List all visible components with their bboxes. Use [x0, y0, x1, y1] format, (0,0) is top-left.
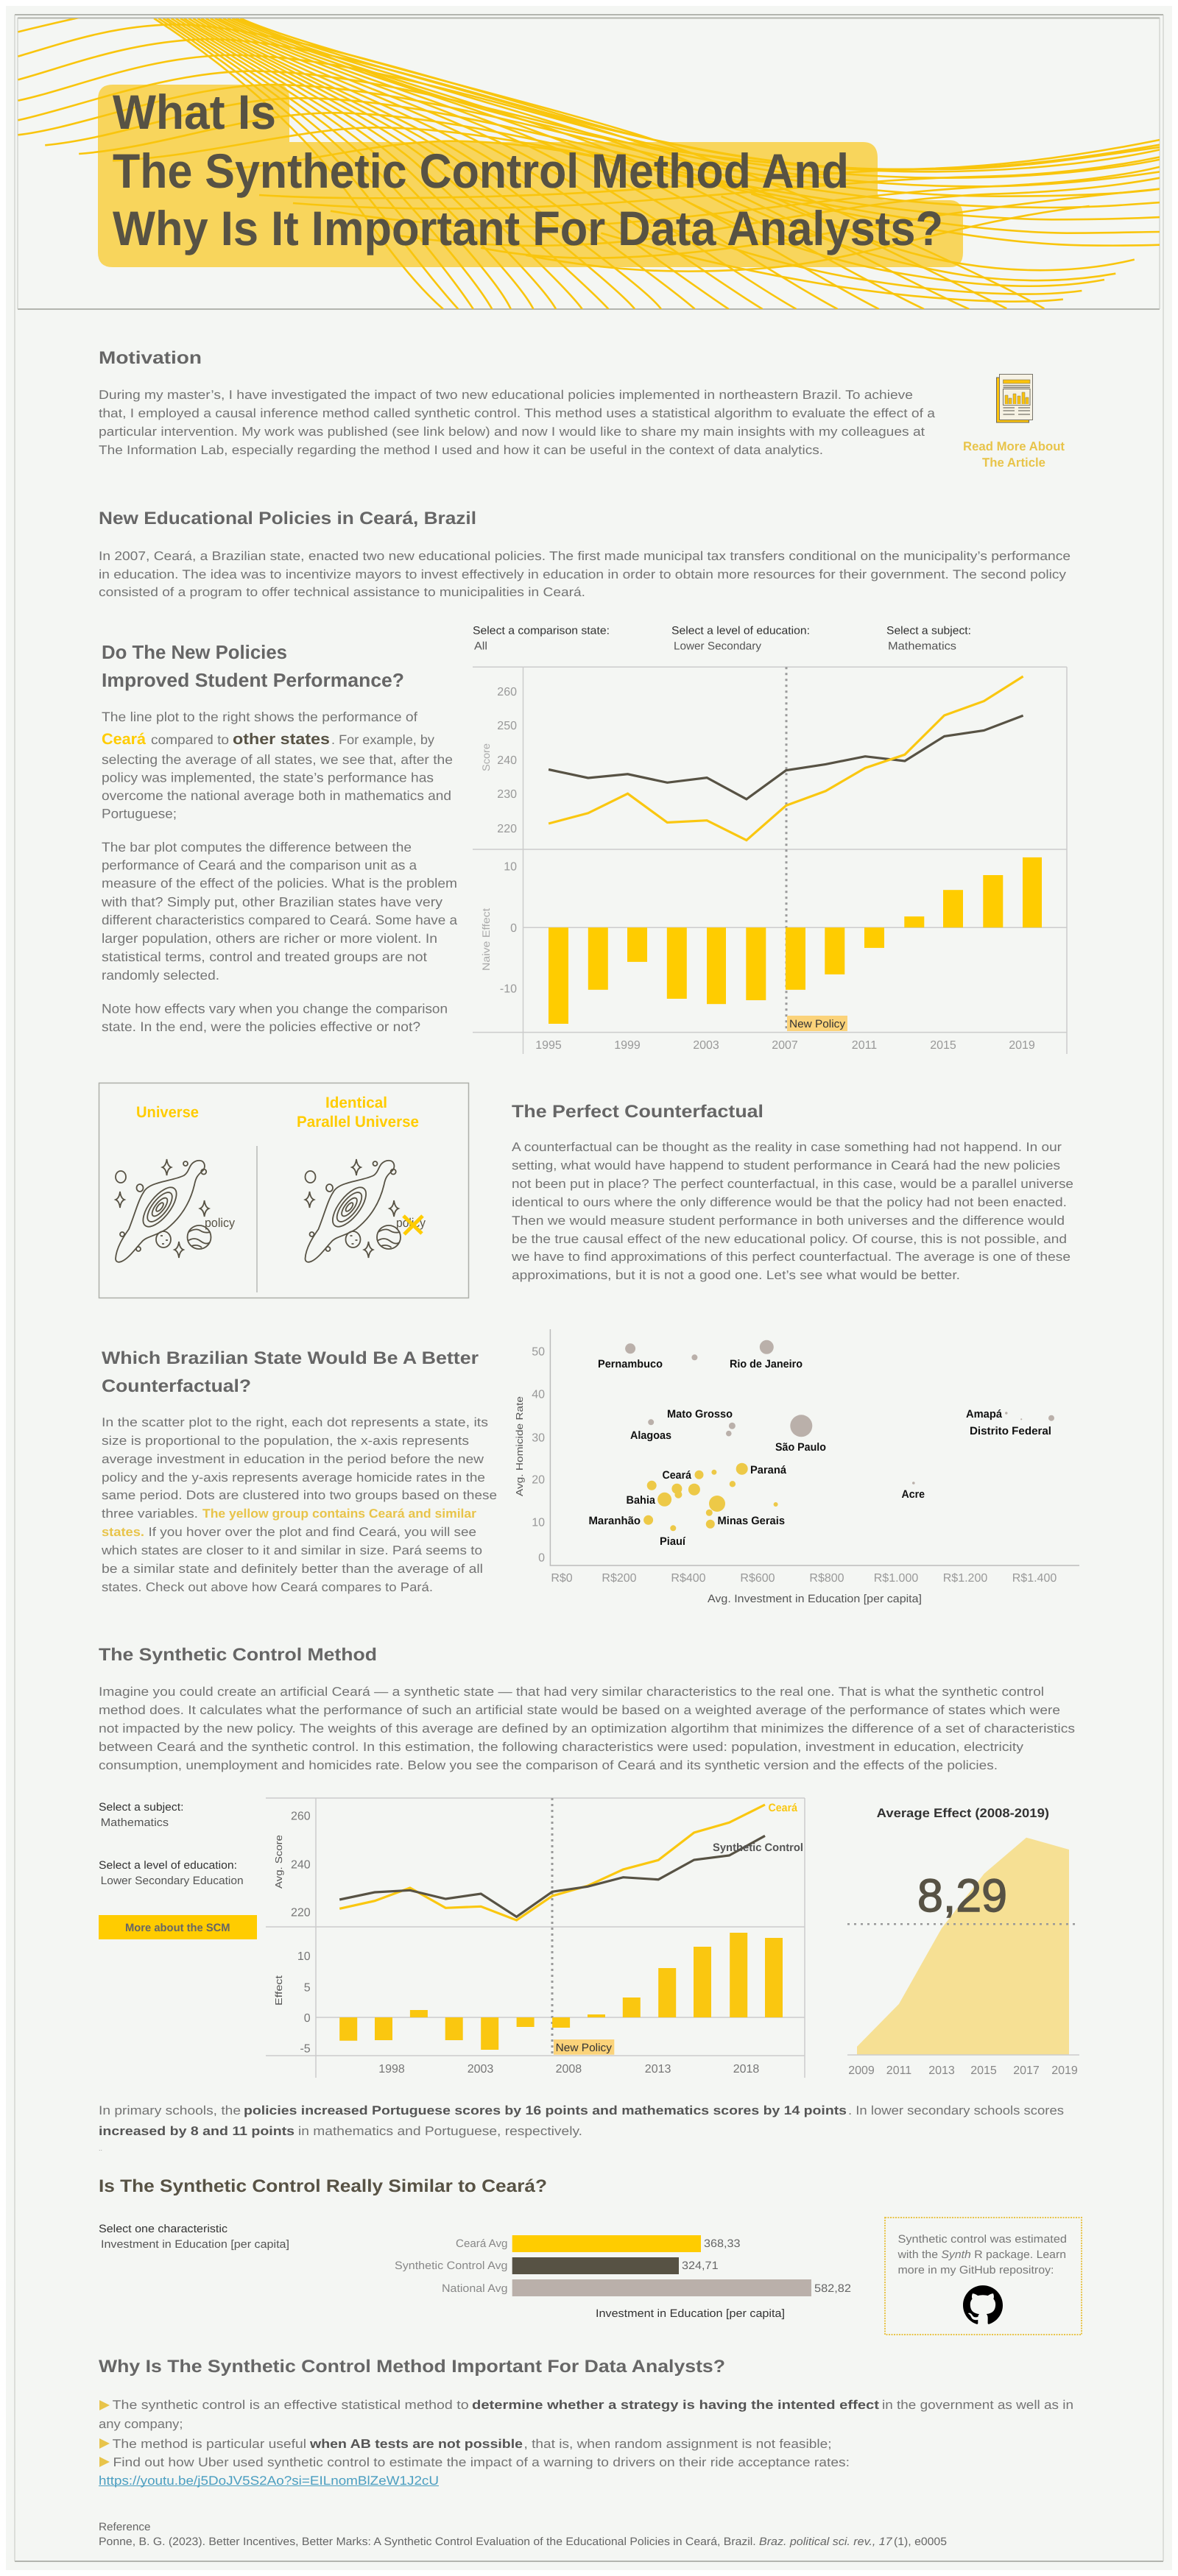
y axis labels [532, 1345, 545, 1565]
text block: why important list: any company; [99, 2417, 183, 2431]
filters: comparison state, level of education, subject [473, 624, 971, 652]
state labels: Maranhão [589, 1515, 641, 1527]
link: read more about the article: The Article [982, 456, 1045, 470]
text block: the perfect counterfactual: setting, what would have happend to student performance in Ceará had the new policies [512, 1158, 1060, 1172]
x axis labels: 2011 [886, 2064, 911, 2077]
value: 8,29: 8,29 [917, 1870, 1007, 1922]
state labels: Piauí [660, 1535, 686, 1548]
x axis labels: R$400 [671, 1572, 706, 1585]
state labels: Acre [901, 1488, 925, 1501]
dots: yellow cluster [643, 1463, 778, 1531]
text block: line and bar plot explanation: randomly selected. [102, 968, 219, 983]
text block: line and bar plot explanation: other states [233, 731, 330, 748]
bar: national avg: 582,82 [814, 2282, 851, 2295]
text block: why important list: in the government as well as in [882, 2398, 1073, 2412]
text block: scatter plot explanation: policy and the y-axis represents average homicide rates in the [102, 1471, 485, 1485]
label: identical parallel universe [297, 1094, 419, 1130]
bar: Ceará avg: 368,33 [704, 2237, 741, 2250]
x axis labels [535, 1039, 1035, 1052]
heading: the perfect counterfactual: The Perfect Counterfactual [512, 1102, 763, 1122]
state labels: Pernambuco [598, 1358, 663, 1370]
heading: do the new policies improve performance: Improved Student Performance? [102, 669, 404, 691]
state labels: Rio de Janeiro [730, 1358, 803, 1370]
text block: line and bar plot explanation: statistical terms, control and treated groups are not [102, 949, 427, 964]
x axis labels: 2007 [772, 1039, 798, 1052]
text block: line and bar plot explanation: with that? Simply put, other Brazilian states have very [101, 895, 442, 910]
y axis labels: 260 [291, 1811, 311, 1822]
text block: the synthetic control method [99, 1685, 1075, 1772]
text block: the synthetic control method: method does. It calculates what the performance of such an artificial state would be based on a weighted average of the performance of states which were [99, 1703, 1060, 1717]
link: read more about the article: Read More About [963, 439, 1065, 453]
label: identical parallel universe: Identical [325, 1094, 387, 1111]
text block: reference: (1), e0005 [894, 2536, 947, 2548]
line: Ceará [549, 676, 1023, 841]
title: The Synthetic Control Method And [113, 144, 849, 198]
text block: reference: Ponne, B. G. (2023). Better Incentives, Better Marks: A Synthetic Control Evaluation of the Educational Policies in Ceará, Brazil. [99, 2536, 756, 2548]
text block: why important list: determine whether a strategy is having the intented effect [472, 2398, 879, 2412]
text block: line and bar plot explanation: The bar plot computes the difference between the [102, 840, 412, 854]
text block: results summary [99, 2103, 1064, 2152]
x axis labels: R$800 [809, 1572, 844, 1585]
text block: the synthetic control method: consumption, unemployment and homicides rate. Below you see the comparison of Ceará and its synthetic version and the effects of the policies. [99, 1758, 998, 1772]
text block: why important list: The method is particular useful [113, 2437, 306, 2451]
text block: motivation: During my master’s, I have investigated the impact of two new educational policies implemented in northeastern Brazil. To achieve [99, 388, 913, 402]
filter: select one characteristic: Investment in Education [per capita] [101, 2238, 289, 2251]
state labels: Bahia [626, 1494, 656, 1507]
filters: comparison state, level of education, subject: Select a subject: [886, 624, 971, 637]
text block: why important list: The synthetic control is an effective statistical method to [113, 2398, 469, 2412]
chart: scatter plot of states [514, 1329, 1079, 1605]
button: more about the SCM: More about the SCM [125, 1922, 230, 1934]
text block: scatter plot explanation: be a similar state and definitely better than the average of all [102, 1562, 483, 1576]
bar: national avg [442, 2279, 851, 2296]
text block: line and bar plot explanation: Ceará [102, 731, 146, 748]
x axis labels: 2013 [928, 2064, 955, 2077]
x axis labels: 2003 [693, 1039, 719, 1052]
text block: the perfect counterfactual [511, 1140, 1073, 1282]
icon: galaxy with policy: policy [205, 1216, 235, 1230]
icon: galaxy with policy [116, 1159, 235, 1262]
x axis labels: 1999 [614, 1039, 641, 1052]
filters: subject and level of education: Select a subject: [99, 1801, 184, 1814]
text block: motivation: particular intervention. My work was published (see link below) and now I would like to share my main insights with my colleagues at [99, 425, 925, 439]
y axis labels: 50 [532, 1345, 545, 1359]
y axis labels: 220 [291, 1906, 311, 1919]
x axis labels: 2017 [1013, 2064, 1040, 2077]
filters: subject and level of education: Select a level of education: [99, 1859, 237, 1872]
callout: github repository: more in my GitHub repositroy: [898, 2264, 1054, 2276]
text block: scatter plot explanation: same period. Dots are clustered into two groups based on these [102, 1488, 497, 1502]
state labels: Mato Grosso [667, 1408, 733, 1420]
heading: do the new policies improve performance: Do The New Policies [102, 641, 287, 663]
x axis labels [378, 2063, 759, 2076]
x axis labels: R$0 [551, 1572, 573, 1585]
y axis labels: score: 0 [510, 922, 517, 935]
text block: the perfect counterfactual: Then we would measure student performance in both universes and the difference would [512, 1214, 1065, 1228]
state labels: Paraná [750, 1464, 787, 1476]
text block: new educational policies: in education. The idea was to incentivize mayors to invest effectively in education in order to obtain more resources for their government. The second policy [99, 567, 1067, 581]
text block: the perfect counterfactual: approximations, but it is not a good one. Let’s see what would be better. [512, 1268, 960, 1282]
y axis labels: score: 250 [497, 720, 517, 732]
state labels: Alagoas [630, 1429, 671, 1442]
text block: the synthetic control method: between Ceará and the synthetic control. In this estimation, the following characteristics were used: population, investment in education, electricity [99, 1740, 1024, 1754]
text block: line and bar plot explanation: Portuguese; [102, 807, 177, 821]
axis title: naive effect: Naive Effect [480, 908, 492, 971]
y axis labels: score: 260 [497, 686, 517, 698]
x axis labels: 2015 [930, 1039, 956, 1052]
callout: github repository [885, 2218, 1082, 2335]
title: Why Is It Important For Data Analysts? [113, 201, 943, 255]
y axis labels: 20 [532, 1473, 545, 1487]
text block: line and bar plot explanation: overcome the national average both in mathematics and [102, 788, 451, 803]
x axis labels: 2008 [556, 2063, 582, 2076]
text block: new educational policies: consisted of a program to offer technical assistance to municipalities in Ceará. [99, 585, 585, 599]
annotation: new policy: New Policy [789, 1018, 846, 1030]
y axis labels: 10 [297, 1950, 311, 1963]
button: more about the SCM [99, 1915, 257, 1939]
heading: better counterfactual: Counterfactual? [102, 1376, 251, 1396]
text block: line and bar plot explanation: performance of Ceará and the comparison unit as a [102, 858, 417, 873]
text block: scatter plot explanation [101, 1415, 497, 1594]
line: comparison states [549, 715, 1023, 799]
text block: results summary: In primary schools, the [99, 2103, 241, 2117]
axis title: score: Score [480, 743, 492, 771]
bar: national avg: National Avg [442, 2282, 508, 2295]
text block: line and bar plot explanation: Note how effects vary when you change the comparison [102, 1001, 448, 1016]
y axis labels: 5 [304, 1981, 311, 1995]
icon: galaxy without policy: policy [396, 1216, 426, 1230]
dots: gray cluster [625, 1340, 1054, 1485]
filters: subject and level of education [99, 1801, 244, 1887]
text block: motivation: The Information Lab, especially regarding the method I used and how it can be useful in the context of data analytics. [99, 443, 823, 457]
bars: naive effect [549, 857, 1042, 1024]
y axis labels [291, 1811, 311, 2055]
filters: comparison state, level of education, subject: Lower Secondary [674, 640, 762, 652]
chart: Ceará vs synthetic control and effect bars [266, 1798, 805, 2078]
text block: line and bar plot explanation: measure of the effect of the policies. What is the problem [102, 876, 457, 891]
text block: line and bar plot explanation: selecting the average of all states, we see that, after the [102, 752, 453, 767]
heading: do the new policies improve performance [102, 641, 404, 691]
heading: motivation: Motivation [99, 348, 202, 368]
text block: results summary: .. [99, 2145, 102, 2152]
y axis labels: score [497, 686, 517, 995]
text block: scatter plot explanation: states. [102, 1525, 144, 1539]
axis title: effect: Effect [273, 1975, 284, 2006]
chart: average effect area [847, 1806, 1079, 2077]
text block: results summary: increased by 8 and 11 points [99, 2124, 294, 2138]
y axis labels: score: 220 [497, 823, 517, 835]
heading: new educational policies: New Educational Policies in Ceará, Brazil [99, 509, 476, 528]
icon: github mark [963, 2285, 1003, 2324]
x axis labels: 2011 [852, 1039, 877, 1052]
x axis labels: 2019 [1009, 1039, 1035, 1052]
line label: synthetic control: Synthetic Control [713, 1841, 803, 1854]
filters: comparison state, level of education, subject: All [474, 640, 487, 652]
heading: why is the method important: Why Is The Synthetic Control Method Important For Data Analysts? [99, 2357, 725, 2377]
text block: the synthetic control method: Imagine you could create an artificial Ceará — a synthetic state — that had very similar characteristics to the real one. That is what the synthetic control [99, 1685, 1044, 1699]
filters: comparison state, level of education, subject: Mathematics [888, 640, 956, 652]
text block: the perfect counterfactual: identical to ours where the only difference would be that the policy had not been enacted. [512, 1195, 1067, 1209]
title: What Is [113, 85, 276, 139]
axis title: x: Avg. Investment in Education [per capita] [708, 1593, 922, 1605]
filters: comparison state, level of education, subject: Select a level of education: [671, 624, 810, 637]
text block: scatter plot explanation: size is proportional to the population, the x-axis represents [102, 1434, 469, 1448]
x axis labels: 2003 [468, 2063, 493, 2076]
text block: line and bar plot explanation: larger population, others are richer or more violent. In [102, 931, 437, 946]
text block: why important list: Find out how Uber used synthetic control to estimate the impact of a warning to drivers on their ride acceptance rates: [113, 2455, 850, 2469]
x axis labels: 2015 [970, 2064, 997, 2077]
annotation: new policy: New Policy [556, 2042, 613, 2054]
text block: results summary: . In lower secondary schools scores [848, 2103, 1064, 2117]
text block: line and bar plot explanation: state. In the end, were the policies effective or not? [102, 1019, 420, 1034]
panel: universe and parallel universe [99, 1083, 468, 1298]
x axis labels: 1998 [378, 2063, 405, 2076]
y axis labels: score: 240 [497, 754, 517, 767]
filters: subject and level of education: Lower Secondary Education [101, 1875, 244, 1887]
text block: new educational policies [99, 549, 1071, 599]
text block: the perfect counterfactual: we have to find approximations of this perfect counterfactual. The average is one of these [511, 1250, 1071, 1264]
text block: scatter plot explanation: If you hover over the plot and find Ceará, you will see [149, 1525, 476, 1539]
icon: article document [997, 374, 1032, 422]
x axis labels: 1995 [535, 1039, 562, 1052]
chart: line plot and naive effect bars [473, 667, 1067, 1054]
text block: motivation: that, I employed a causal inference method called synthetic control. This method uses a statistical algorithm to evaluate the effect of a [99, 406, 936, 420]
text block: reference: Braz. political sci. rev., 17 [759, 2536, 892, 2548]
title highlight [98, 85, 963, 267]
x axis labels [848, 2064, 1078, 2077]
text block: line and bar plot explanation: different characteristics compared to Ceará. Some have a [102, 913, 458, 927]
bar: synthetic control avg: 324,71 [682, 2260, 719, 2272]
bar: synthetic control avg [395, 2257, 719, 2274]
text block: the perfect counterfactual: be the true causal effect of the new educational policy. Of course, this is not possible, and [512, 1232, 1067, 1246]
y axis labels: -5 [300, 2043, 311, 2055]
x axis labels: 2013 [645, 2063, 671, 2076]
text block: scatter plot explanation: three variables. [102, 1507, 198, 1521]
text block: why important list: when AB tests are not possible [309, 2437, 523, 2451]
state labels [589, 1358, 1051, 1548]
heading: better counterfactual [102, 1348, 479, 1396]
banner: title with wave lines [18, 13, 1160, 309]
state labels: Ceará [663, 1469, 692, 1482]
filter: select one characteristic: Select one characteristic [99, 2223, 228, 2235]
state labels: Distrito Federal [970, 1425, 1051, 1437]
y axis labels: 10 [532, 1516, 545, 1529]
text block: the synthetic control method: not impacted by the new policy. The weights of this average are defined by an optimization algortihm that minimizes the difference of a set of characteristics [99, 1722, 1075, 1735]
icon: galaxy without policy [305, 1159, 426, 1262]
text block: scatter plot explanation: The yellow group contains Ceará and similar [202, 1507, 476, 1521]
x axis labels: R$600 [740, 1572, 775, 1585]
bar: Ceará avg: Ceará Avg [456, 2237, 508, 2250]
text block: scatter plot explanation: states. Check out above how Ceará compares to Pará. [102, 1580, 433, 1594]
text block: results summary: in mathematics and Portuguese, respectively. [298, 2124, 582, 2138]
text block: scatter plot explanation: In the scatter plot to the right, each dot represents a state, its [102, 1415, 488, 1429]
text block: line and bar plot explanation: The line plot to the right shows the performance of [102, 710, 418, 724]
x axis labels: 2009 [848, 2064, 875, 2077]
link: read more about the article [963, 439, 1065, 470]
heading: the synthetic control method: The Synthetic Control Method [99, 1645, 377, 1665]
text block: scatter plot explanation: average investment in education in the period before the new [102, 1452, 484, 1466]
x axis labels: 2018 [733, 2063, 759, 2076]
filter: select one characteristic [99, 2223, 289, 2251]
chart title: Average Effect (2008-2019) [877, 1806, 1049, 1820]
link: uber video: https://youtu.be/j5DoJV5S2Ao?si=EILnomBlZeW1J2cU [99, 2474, 439, 2488]
x axis labels [551, 1572, 1057, 1585]
text block: the perfect counterfactual: A counterfactual can be thought as the reality in case something had not happend. In our [512, 1140, 1062, 1154]
axis title: y: Avg. Homicide Rate [514, 1396, 525, 1496]
y axis labels: score: -10 [500, 983, 517, 995]
x axis labels: R$1.400 [1012, 1572, 1057, 1585]
text block: why important list: , that is, when random assignment is not feasible; [524, 2437, 832, 2451]
text block: reference: Reference [99, 2521, 150, 2533]
text block: line and bar plot explanation [101, 710, 458, 1034]
x axis labels: R$200 [602, 1572, 637, 1585]
text block: scatter plot explanation: which states are closer to it and similar in size. Pará seems to [101, 1543, 482, 1557]
callout: github repository: with the Synth R package. Learn [897, 2248, 1066, 2261]
text block: line and bar plot explanation: policy was implemented, the state’s performance has [102, 770, 434, 785]
y axis labels: 0 [538, 1551, 545, 1565]
x axis labels: R$1.200 [943, 1572, 987, 1585]
heading: better counterfactual: Which Brazilian State Would Be A Better [102, 1348, 479, 1368]
chart: investment comparison bars [395, 2235, 851, 2320]
state labels: Amapá [966, 1408, 1003, 1420]
callout: github repository: Synthetic control was estimated [898, 2233, 1067, 2246]
state labels: Minas Gerais [717, 1515, 785, 1527]
line label: Ceará: Ceará [769, 1802, 798, 1814]
line: Ceará [339, 1805, 765, 1920]
bar: Ceará avg [456, 2235, 741, 2252]
text block: reference [99, 2521, 947, 2548]
text block: line and bar plot explanation: . For example, by [331, 732, 434, 747]
state labels: São Paulo [775, 1441, 826, 1454]
title [113, 85, 943, 255]
text block: motivation [99, 388, 936, 457]
line: synthetic control [339, 1836, 765, 1917]
text block: why important list [99, 2398, 1073, 2488]
y axis labels: 0 [304, 2012, 311, 2025]
bar: synthetic control avg: Synthetic Control Avg [395, 2260, 508, 2272]
y axis labels: score: 10 [504, 861, 517, 873]
y axis labels: 240 [291, 1859, 311, 1871]
label: universe: Universe [136, 1104, 199, 1121]
x axis labels: R$1.000 [874, 1572, 918, 1585]
axis title: avg score: Avg. Score [273, 1835, 284, 1889]
y axis labels: 30 [532, 1432, 545, 1444]
bars: effect [339, 1933, 783, 2050]
filters: subject and level of education: Mathematics [101, 1816, 169, 1829]
text block: line and bar plot explanation: compared to [151, 732, 229, 747]
heading: is the synthetic control similar: Is The Synthetic Control Really Similar to Ceará? [99, 2176, 547, 2196]
filters: comparison state, level of education, subject: Select a comparison state: [473, 624, 610, 637]
x axis labels: 2019 [1051, 2064, 1078, 2077]
label: identical parallel universe: Parallel Universe [297, 1114, 419, 1130]
text block: new educational policies: In 2007, Ceará, a Brazilian state, enacted two new educational policies. The first made municipal tax transfers conditional on the municipality’s performance [99, 549, 1071, 563]
y axis labels: score: 230 [497, 788, 517, 801]
text block: the perfect counterfactual: not been put in place? The perfect counterfactual, in this case, would be a parallel universe [512, 1177, 1073, 1191]
y axis labels: 40 [532, 1388, 545, 1401]
axis title: Investment in Education [per capita] [596, 2307, 785, 2320]
text block: results summary: policies increased Portuguese scores by 16 points and mathematics scores by 14 points [244, 2103, 847, 2117]
